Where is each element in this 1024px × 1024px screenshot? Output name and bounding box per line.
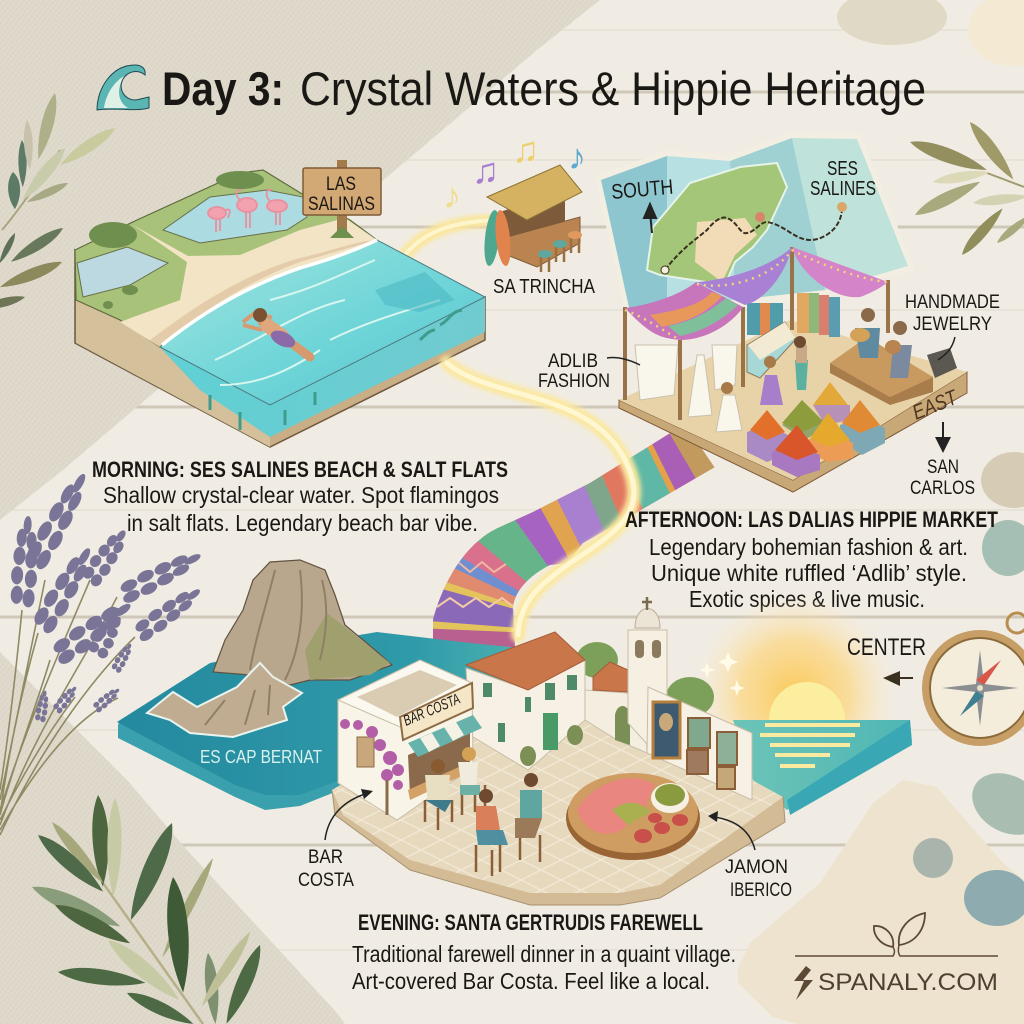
rack: coloured garments — [747, 293, 840, 337]
music notes: ♪ — [568, 136, 586, 177]
flamingos — [208, 190, 287, 232]
golden route: bar to beach — [405, 220, 495, 255]
platform label: East: EAST — [909, 385, 962, 425]
bougainvillea — [340, 719, 404, 790]
icon: wave — [97, 65, 149, 110]
evening text block: EVENING: SANTA GERTRUDIS FAREWELL — [358, 910, 703, 935]
label: Center — [847, 634, 926, 686]
sign: Bar Costa — [400, 683, 473, 740]
island sea tile — [117, 632, 540, 810]
bush behind wall — [666, 677, 714, 717]
pebbles on rock — [913, 838, 1024, 926]
window — [357, 737, 374, 767]
arch wall — [585, 662, 647, 753]
sign: Bar Costa: BAR COSTA — [401, 691, 463, 730]
wave highlights — [215, 260, 440, 385]
water front face — [160, 297, 485, 437]
plaza edge — [332, 790, 785, 905]
stage with musicians — [830, 308, 957, 405]
evening text block — [352, 910, 736, 994]
music notes: ♫ — [472, 150, 499, 191]
map — [595, 132, 915, 320]
map sand — [695, 218, 757, 282]
swimmer — [243, 308, 310, 357]
stones: right edge — [961, 452, 1024, 847]
jewelry table — [747, 322, 795, 378]
shoppers — [716, 336, 808, 432]
label: Bar Costa — [298, 789, 373, 891]
map island — [647, 163, 787, 285]
map: SALINES — [810, 178, 876, 200]
art wall — [647, 687, 752, 800]
music notes — [443, 129, 586, 216]
label: Jamon Iberico — [708, 811, 792, 901]
label: Jamon Iberico: IBERICO — [730, 880, 792, 901]
land top — [75, 170, 377, 347]
afternoon text block — [625, 507, 998, 612]
label: Adlib Fashion: ADLIB — [548, 351, 598, 372]
arrow and label: San Carlos — [910, 422, 975, 499]
sign: Las Salinas — [303, 160, 381, 238]
block: soil base — [75, 250, 485, 447]
string lights — [625, 250, 888, 340]
stools — [538, 231, 582, 272]
platform top — [619, 320, 967, 480]
block: soil slope — [76, 300, 270, 447]
afternoon text block: Exotic spices & live music. — [689, 586, 925, 612]
bushes — [89, 171, 264, 309]
morning text block — [92, 457, 508, 536]
music notes: ♫ — [512, 129, 539, 170]
label: Handmade Jewelry — [905, 292, 1000, 360]
map labels: SOUTH — [610, 176, 674, 204]
panel: morning beach block — [75, 160, 485, 447]
stones: top right — [837, 0, 1024, 66]
label: Bar Costa: BAR — [308, 847, 343, 868]
linen cloth: top left — [0, 0, 600, 520]
map arrow — [644, 204, 656, 233]
title: Day 3: — [162, 62, 284, 115]
afternoon text block: Legendary bohemian fashion & art. — [649, 534, 968, 560]
stall posts — [625, 247, 888, 420]
tree — [576, 642, 618, 678]
salt pan — [77, 247, 168, 297]
morning text block: in salt flats. Legendary beach bar vibe. — [127, 510, 478, 536]
logo: Spanaly: SPANALY.COM — [818, 969, 998, 996]
hanging clothes — [635, 345, 737, 417]
label: Bar Costa: COSTA — [298, 870, 354, 891]
linen cloth: bottom left — [0, 652, 345, 1024]
diners — [425, 747, 542, 876]
panel: evening village plaza — [332, 597, 785, 905]
beach sand — [120, 218, 377, 347]
platform sides — [619, 372, 967, 492]
label: Handmade Jewelry: HANDMADE — [905, 292, 1000, 313]
label: Es Cap Bernat: ES CAP BERNAT — [200, 747, 322, 767]
map route — [665, 208, 842, 270]
evening text block: Traditional farewell dinner in a quaint village. — [352, 941, 736, 967]
panel: afternoon market — [619, 247, 967, 492]
evening text block: Art-covered Bar Costa. Feel like a local. — [352, 968, 710, 994]
deep patch — [375, 272, 455, 312]
flamingo lagoon — [163, 190, 307, 243]
awning: right — [792, 247, 888, 297]
awning — [408, 715, 482, 757]
map: SES — [827, 158, 858, 180]
arrow and label: San Carlos: SAN — [927, 457, 959, 478]
white farmhouse — [466, 632, 585, 770]
textile path — [437, 446, 700, 650]
lavender sprigs — [0, 468, 206, 835]
large sandstone rock — [738, 780, 1024, 1024]
seaweed — [210, 310, 462, 430]
morning text block: Shallow crystal-clear water. Spot flamingos — [103, 482, 499, 508]
wet sand strip — [150, 240, 377, 347]
sign: Las Salinas: LAS — [326, 174, 356, 195]
plaza floor — [332, 690, 783, 893]
label: Handmade Jewelry: JEWELRY — [913, 314, 992, 335]
music notes: ♪ — [443, 175, 461, 216]
label: Adlib Fashion — [538, 351, 640, 392]
spice mounds — [747, 382, 885, 477]
title: Crystal Waters & Hippie Heritage — [300, 62, 926, 115]
olive branch: top left — [0, 92, 118, 313]
label: Adlib Fashion: FASHION — [538, 371, 610, 392]
olive branch: bottom left — [29, 795, 267, 1024]
label: Sa Trincha: SA TRINCHA — [493, 276, 596, 298]
awning: middle — [697, 247, 792, 305]
compass — [922, 613, 1024, 746]
golden route: beach to village — [447, 363, 634, 635]
surf line — [162, 240, 377, 345]
awning: left — [625, 282, 743, 340]
Es Vedra rock — [147, 560, 392, 737]
logo: Spanaly — [794, 913, 998, 1000]
afternoon text block: Unique white ruffled ‘Adlib’ style. — [651, 560, 967, 586]
surfboards — [482, 209, 502, 267]
label: Jamon Iberico: JAMON — [725, 857, 788, 878]
sea surface — [160, 240, 485, 405]
label: Center: CENTER — [847, 634, 926, 661]
olive branch: top right — [908, 118, 1024, 258]
arrow and label: San Carlos: CARLOS — [910, 478, 975, 499]
beach bar: Sa Trincha — [482, 165, 582, 272]
jamon platter — [566, 773, 700, 860]
morning text block: MORNING: SES SALINES BEACH & SALT FLATS — [92, 457, 508, 482]
sign: Las Salinas: SALINAS — [308, 194, 375, 215]
Bar Costa building — [338, 660, 482, 820]
church tower — [628, 597, 667, 745]
sunset and sea — [695, 595, 912, 815]
